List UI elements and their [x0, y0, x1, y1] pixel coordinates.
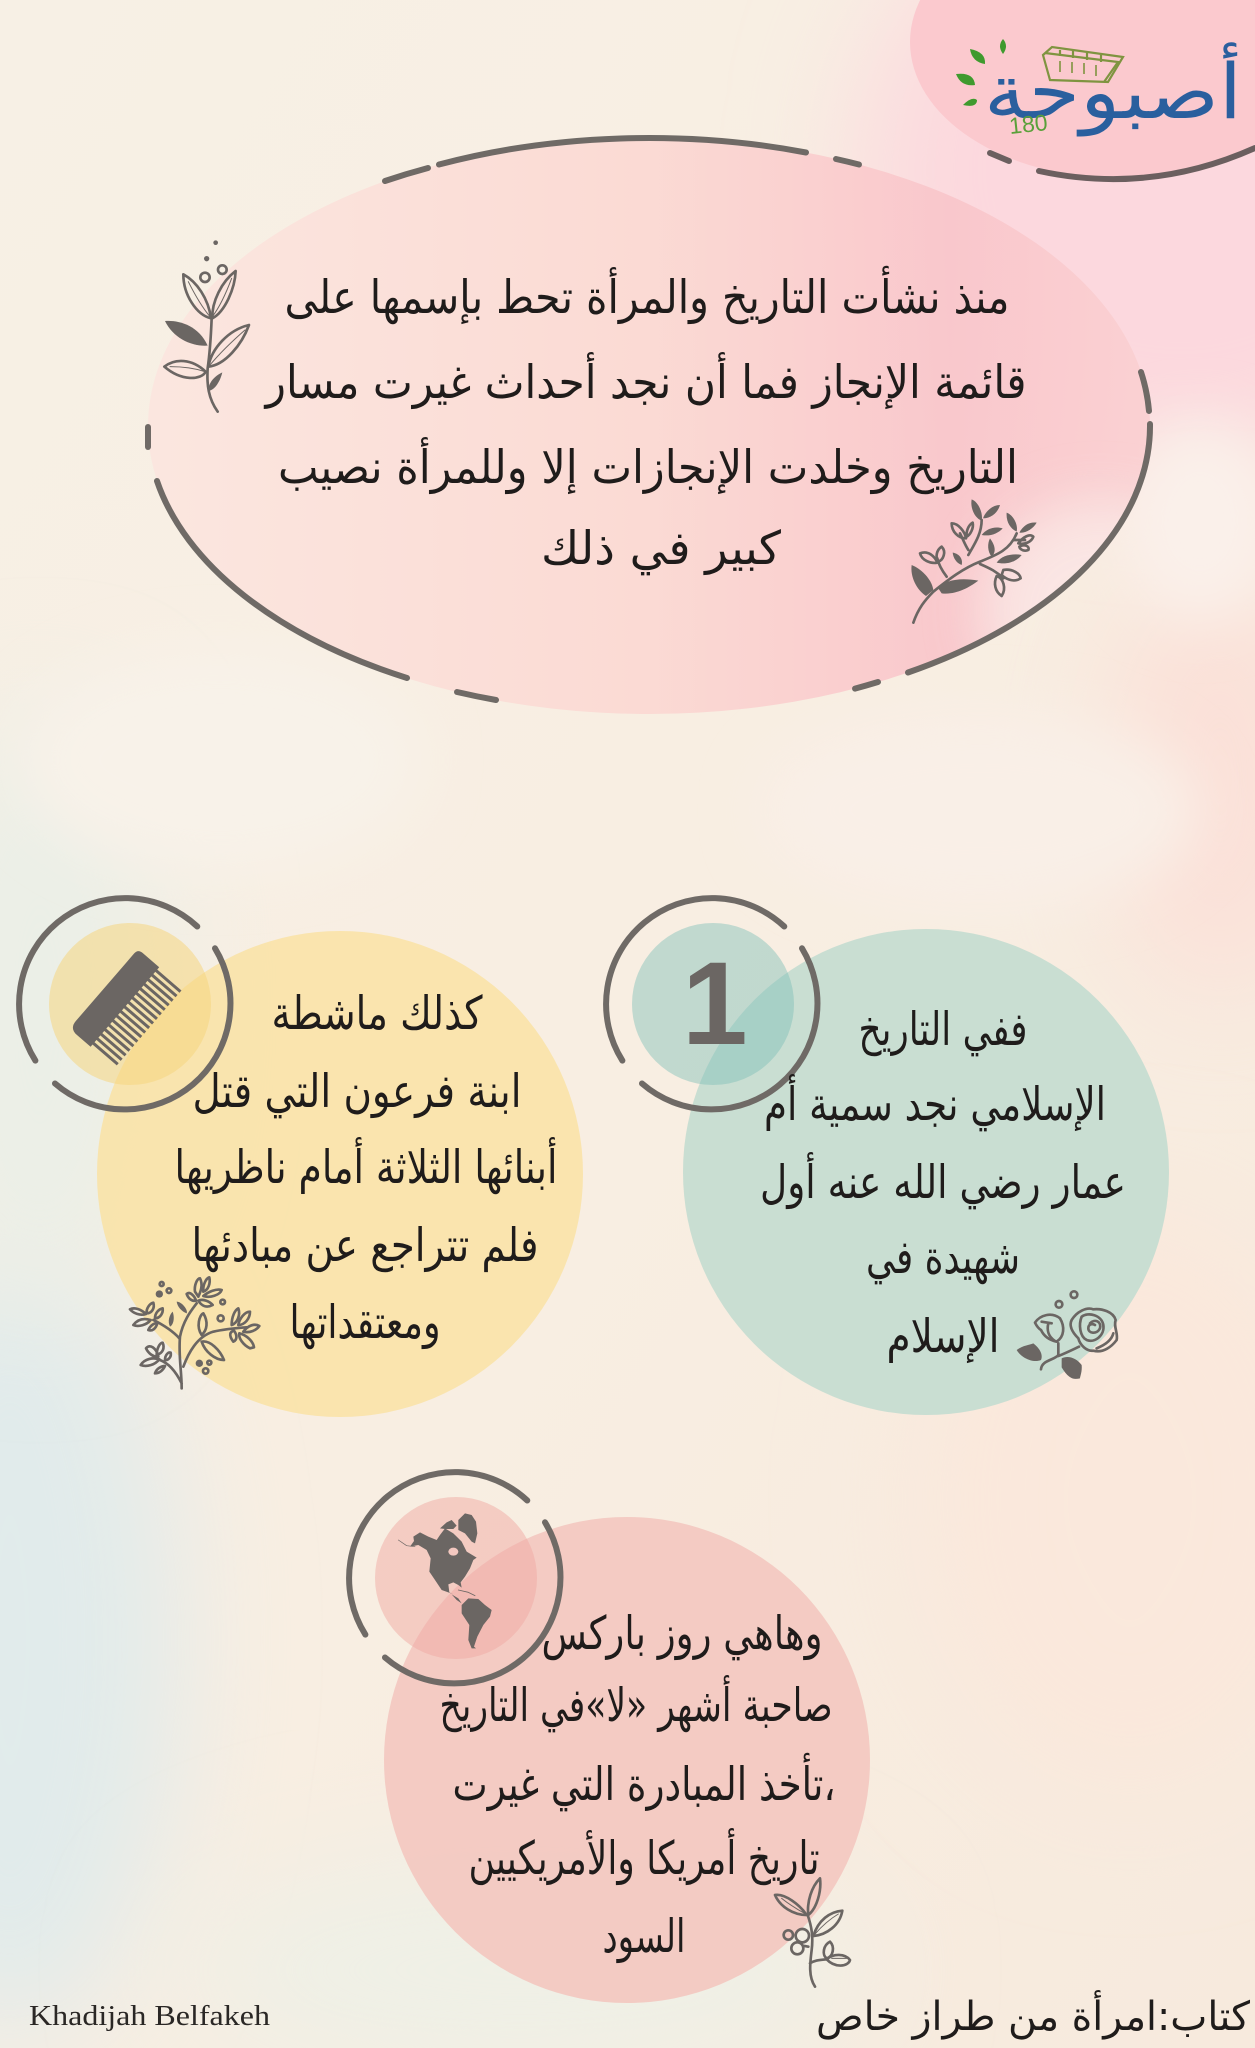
intro text: منذ نشأت التاريخ والمرأة تحط بإسمها على — [284, 265, 1010, 325]
red text: ،تأخذ المبادرة التي غيرت — [452, 1752, 836, 1812]
number 1: 1 — [682, 938, 748, 1070]
yellow text — [174, 986, 558, 1350]
icon: floral sprig — [130, 1277, 259, 1388]
yellow small circle — [49, 923, 211, 1085]
panel: intro ellipse — [148, 138, 1220, 720]
panel: red circle — [349, 1472, 870, 2003]
red text — [440, 1606, 836, 1964]
intro text — [264, 265, 1027, 576]
intro text: التاريخ وخلدت الإنجازات إلا وللمرأة نصيب — [278, 437, 1018, 495]
icon: sprig top left of intro — [164, 240, 249, 412]
green text: شهيدة في — [866, 1230, 1020, 1285]
intro text: قائمة الإنجاز فما أن نجد أحداث غيرت مسار — [264, 352, 1027, 410]
intro text: كبير في ذلك — [541, 521, 781, 576]
red small circle — [375, 1497, 537, 1659]
intro ellipse dashed outline — [148, 138, 1150, 700]
yellow text: فلم تتراجع عن مبادئها — [192, 1218, 538, 1273]
yellow text: ابنة فرعون التي قتل — [192, 1064, 522, 1119]
footer: author name: Khadijah Belfakeh — [29, 2001, 270, 2032]
logo badge: pink ellipse — [910, 0, 1255, 178]
logo: wordmark: أصبوحة — [984, 42, 1242, 137]
red text: وهاهي روز باركس — [542, 1606, 822, 1661]
yellow text: أبنائها الثلاثة أمام ناظريها — [174, 1137, 558, 1195]
icon: rose — [1017, 1291, 1117, 1379]
panel: yellow circle — [19, 898, 583, 1417]
red icon ring — [349, 1472, 560, 1683]
green text: الإسلام — [886, 1309, 1000, 1363]
yellow text: ومعتقداتها — [290, 1295, 440, 1350]
green small circle — [632, 923, 794, 1085]
red text: السود — [602, 1909, 686, 1964]
green text — [760, 1002, 1126, 1363]
logo: building — [1043, 47, 1123, 82]
green icon ring — [606, 898, 817, 1109]
icon: map of the Americas — [398, 1513, 492, 1648]
panel: green circle — [606, 898, 1169, 1415]
logo badge: dashed arc — [990, 148, 1255, 179]
logo: leaves — [956, 39, 1006, 106]
red text: صاحبة أشهر «لا»في التاريخ — [440, 1675, 832, 1733]
green text: عمار رضي الله عنه أول — [760, 1152, 1126, 1210]
green text: ففي التاريخ — [858, 1002, 1028, 1057]
icon: sprig bottom right of intro — [911, 499, 1037, 623]
logo: number 180: 180 — [1008, 109, 1049, 139]
green text: الإسلامي نجد سمية أم — [764, 1074, 1106, 1132]
footer: book title: كتاب:امرأة من طراز خاص — [816, 1990, 1251, 2040]
yellow icon ring — [19, 898, 230, 1109]
red text: تاريخ أمريكا والأمريكيين — [468, 1828, 820, 1886]
icon: berry sprig — [775, 1878, 850, 1987]
yellow text: كذلك ماشطة — [272, 986, 483, 1040]
logo: Osbouha 180 — [956, 39, 1242, 139]
icon: comb — [69, 949, 183, 1068]
